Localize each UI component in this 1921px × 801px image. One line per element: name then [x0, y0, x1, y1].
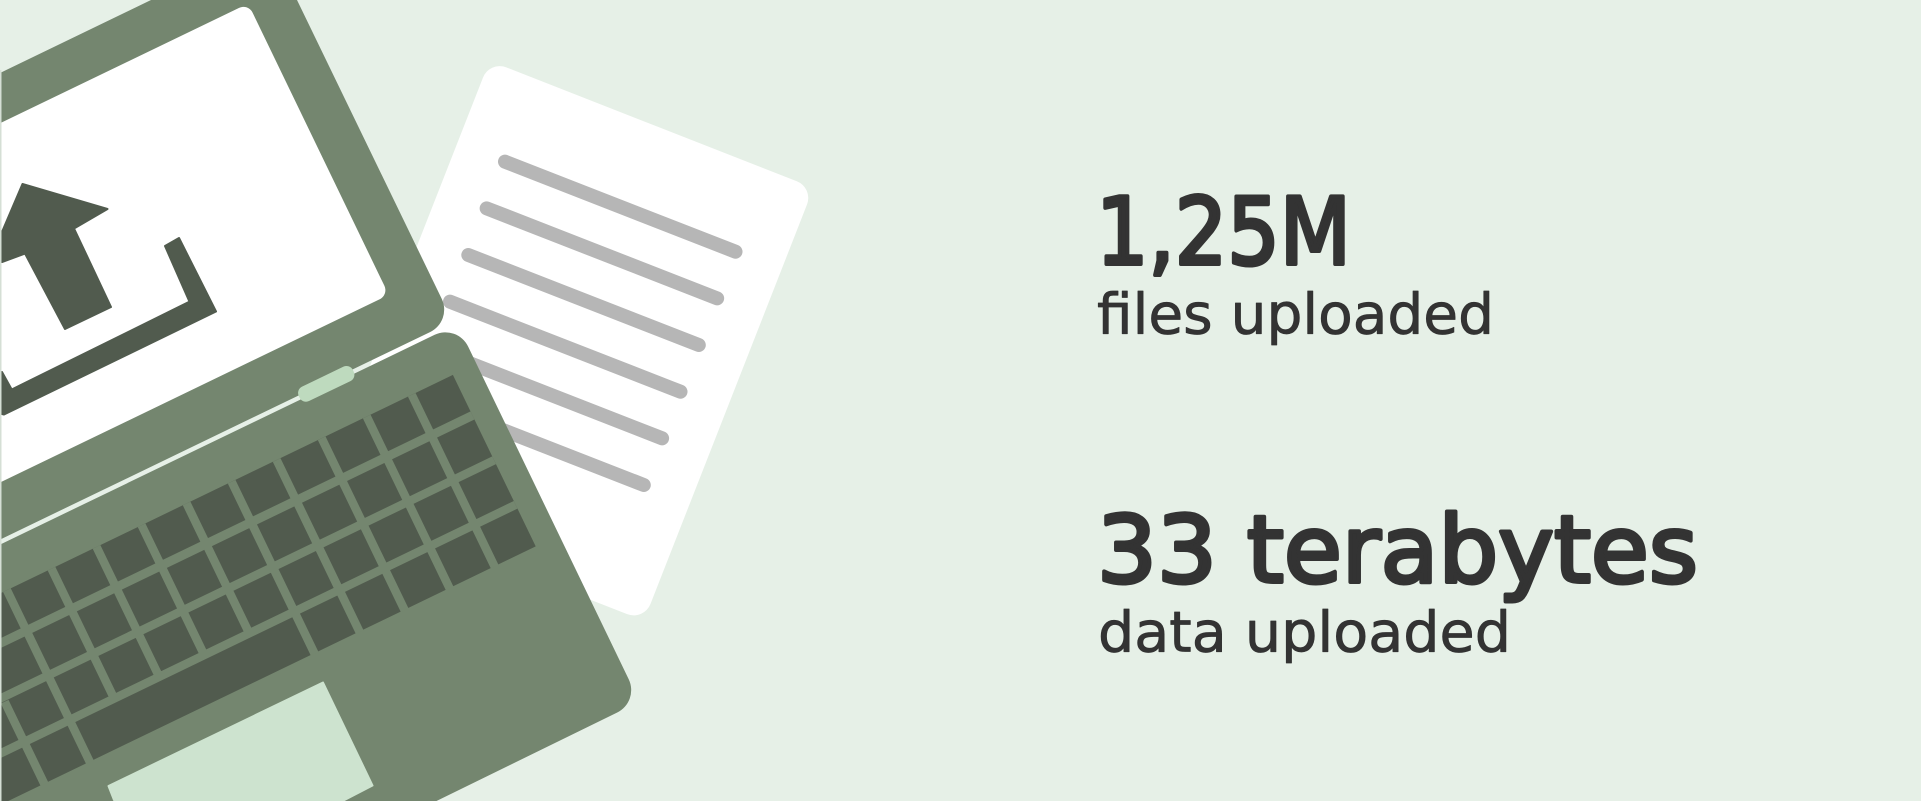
upload icon	[2, 184, 216, 414]
hinge	[296, 364, 357, 404]
laptop screen	[0, 7, 385, 483]
left edge line	[0, 70, 2, 801]
laptop lid	[0, 0, 444, 540]
document text lines	[413, 162, 736, 485]
stat value 33 terabytes: 33 terabytes	[1097, 496, 1698, 604]
stat label files uploaded: files uploaded	[1097, 282, 1494, 348]
upload arrow	[2, 184, 111, 329]
laptop	[0, 0, 631, 801]
stat label data uploaded: data uploaded	[1098, 600, 1511, 666]
stat: data uploaded	[1097, 496, 1698, 666]
keyboard	[0, 375, 536, 801]
key grid	[0, 375, 536, 797]
trackpad	[108, 682, 372, 800]
stat: files uploaded	[1096, 178, 1494, 348]
document sheet	[320, 61, 814, 621]
stat value 1,25M: 1,25M	[1096, 178, 1351, 286]
upload tray	[2, 238, 216, 414]
laptop base	[0, 332, 631, 801]
